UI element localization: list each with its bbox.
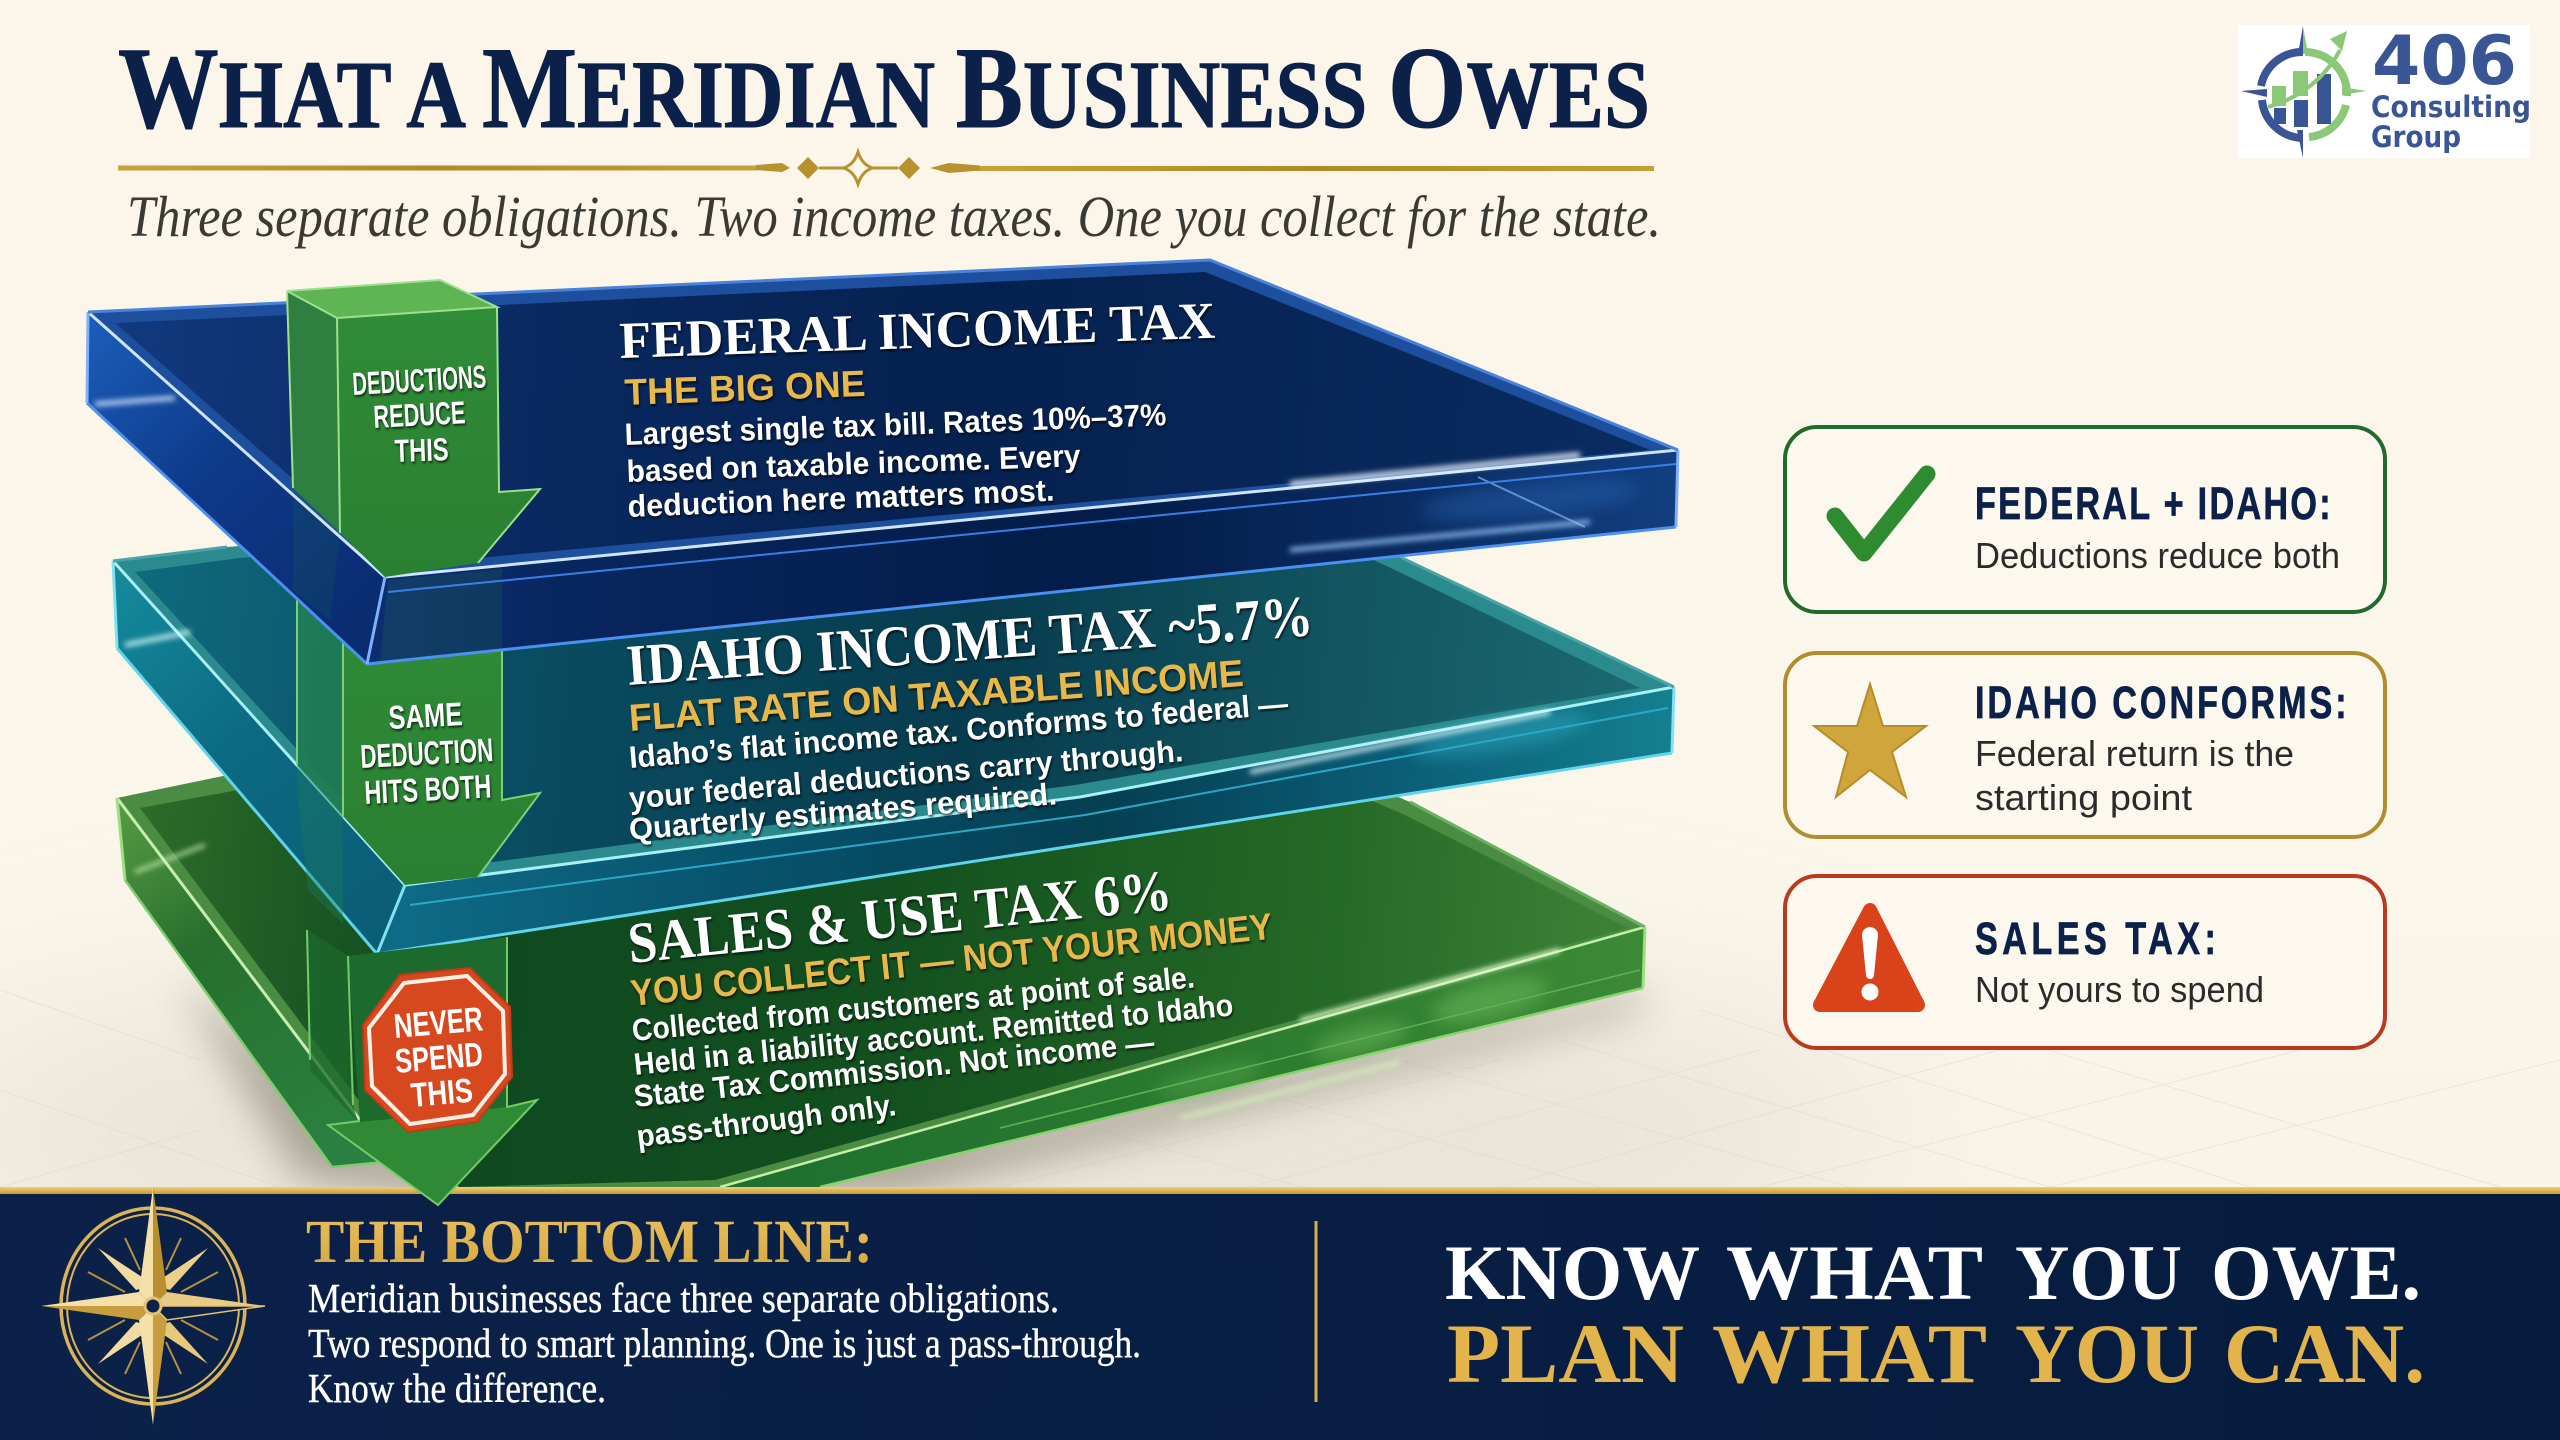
arrow: never spend this <box>307 930 537 1205</box>
call to action <box>1445 1229 2425 1401</box>
bottom line body: Meridian businesses face three separate obligations. <box>308 1275 1059 1321</box>
call to action: OWE. <box>2211 1229 2421 1316</box>
card: federal + Idaho <box>1785 427 2385 612</box>
card: Idaho conforms: starting point <box>1975 777 2192 818</box>
arrow label: same deduction hits both <box>359 695 494 811</box>
card: Idaho conforms: IDAHO CONFORMS: <box>1975 679 2347 728</box>
card: Idaho conforms: Federal return is the <box>1975 733 2294 774</box>
call to action: WHAT <box>1726 1229 1983 1316</box>
arrow label: deductions reduce this: THIS <box>394 431 449 469</box>
Federal slab text <box>618 293 1216 524</box>
title divider ornament <box>118 152 1654 184</box>
Idaho slab text: Idaho’s flat income tax. Conforms to federal — <box>628 686 1289 775</box>
sales tax text <box>625 857 1275 1154</box>
call to action: WHAT <box>1712 1307 1987 1401</box>
stop sign: never spend this: THIS <box>409 1072 474 1115</box>
call to action: YOU <box>2015 1307 2199 1401</box>
Idaho slab text: FLAT RATE ON TAXABLE INCOME <box>628 653 1245 740</box>
icon: compass with rising chart <box>2241 26 2366 158</box>
arrow label: deductions reduce this: DEDUCTIONS <box>351 358 487 402</box>
Federal slab text: deduction here matters most. <box>627 473 1055 524</box>
call to action: YOU <box>2015 1229 2182 1316</box>
arrow label: same deduction hits both: HITS BOTH <box>363 767 492 811</box>
Idaho slab text: your federal deductions carry through. <box>628 733 1185 816</box>
icon: check mark <box>1835 474 1927 553</box>
icon: warning triangle <box>1820 910 1918 1005</box>
footer band <box>0 1187 2560 1440</box>
Federal slab text: Largest single tax bill. Rates 10%–37% <box>624 397 1167 452</box>
slab shadows <box>180 980 1645 1195</box>
Idaho slab text <box>624 583 1315 847</box>
Federal slab text: FEDERAL INCOME TAX <box>618 293 1216 370</box>
logo: 406 Consulting Group <box>2238 22 2531 158</box>
card: sales tax: Not yours to spend <box>1975 969 2264 1010</box>
sales tax text: Held in a liability account. Remitted to Idaho <box>632 987 1235 1082</box>
arrow label: deductions reduce this <box>351 358 487 469</box>
bottom line heading: THE BOTTOM LINE: <box>306 1209 873 1276</box>
card: federal + Idaho: FEDERAL + IDAHO: <box>1975 480 2331 529</box>
sales tax text: pass-through only. <box>635 1087 898 1154</box>
logo: 406 Consulting Group: Consulting <box>2371 90 2531 124</box>
card: sales tax <box>1785 876 2385 1048</box>
Idaho slab text: Quarterly estimates required. <box>628 776 1058 847</box>
title: WHAT A MERIDIAN BUSINESS OWES <box>118 24 1650 153</box>
stop sign: never spend this: SPEND <box>393 1035 484 1081</box>
sales tax text: State Tax Commission. Not income — <box>632 1024 1156 1114</box>
arrow label: same deduction hits both: DEDUCTION <box>359 731 494 775</box>
Federal slab text: THE BIG ONE <box>624 363 866 413</box>
arrow: same deduction hits both <box>297 600 540 924</box>
panel: sales and use tax slab <box>117 725 1645 1187</box>
icon: compass rose <box>41 1187 265 1425</box>
call to action: KNOW <box>1445 1229 1700 1316</box>
Federal slab text: based on taxable income. Every <box>626 438 1082 489</box>
bottom line body: Know the difference. <box>308 1365 606 1411</box>
icon: gold star <box>1814 684 1926 797</box>
subtitle: Three separate obligations. Two income taxes. One you collect for the state. <box>127 184 1661 249</box>
card: sales tax: SALES TAX: <box>1975 915 2216 964</box>
card: Idaho conforms <box>1785 653 2385 837</box>
card: federal + Idaho: Deductions reduce both <box>1975 535 2340 576</box>
panel: federal income tax slab <box>87 260 1678 664</box>
stop sign: never spend this <box>363 968 512 1132</box>
panel: Idaho income tax slab <box>113 473 1674 954</box>
bottom line body <box>308 1275 1141 1411</box>
Idaho slab text: IDAHO INCOME TAX ~5.7% <box>624 583 1315 698</box>
call to action: CAN. <box>2224 1307 2425 1401</box>
logo: 406 Consulting Group: 406 <box>2372 22 2517 101</box>
bottom line body: Two respond to smart planning. One is just a pass-through. <box>308 1320 1141 1366</box>
arrow label: same deduction hits both: SAME <box>387 695 463 736</box>
call to action: PLAN <box>1447 1307 1684 1401</box>
arrow label: deductions reduce this: REDUCE <box>372 394 466 435</box>
arrow: deductions reduce this <box>287 280 540 577</box>
sales tax text: YOU COLLECT IT — NOT YOUR MONEY <box>629 906 1275 1014</box>
sales tax text: Collected from customers at point of sale. <box>630 959 1196 1048</box>
logo: 406 Consulting Group: Group <box>2371 120 2461 154</box>
sales tax text: SALES & USE TAX 6% <box>625 857 1175 976</box>
stop sign: never spend this: NEVER <box>392 1000 484 1046</box>
